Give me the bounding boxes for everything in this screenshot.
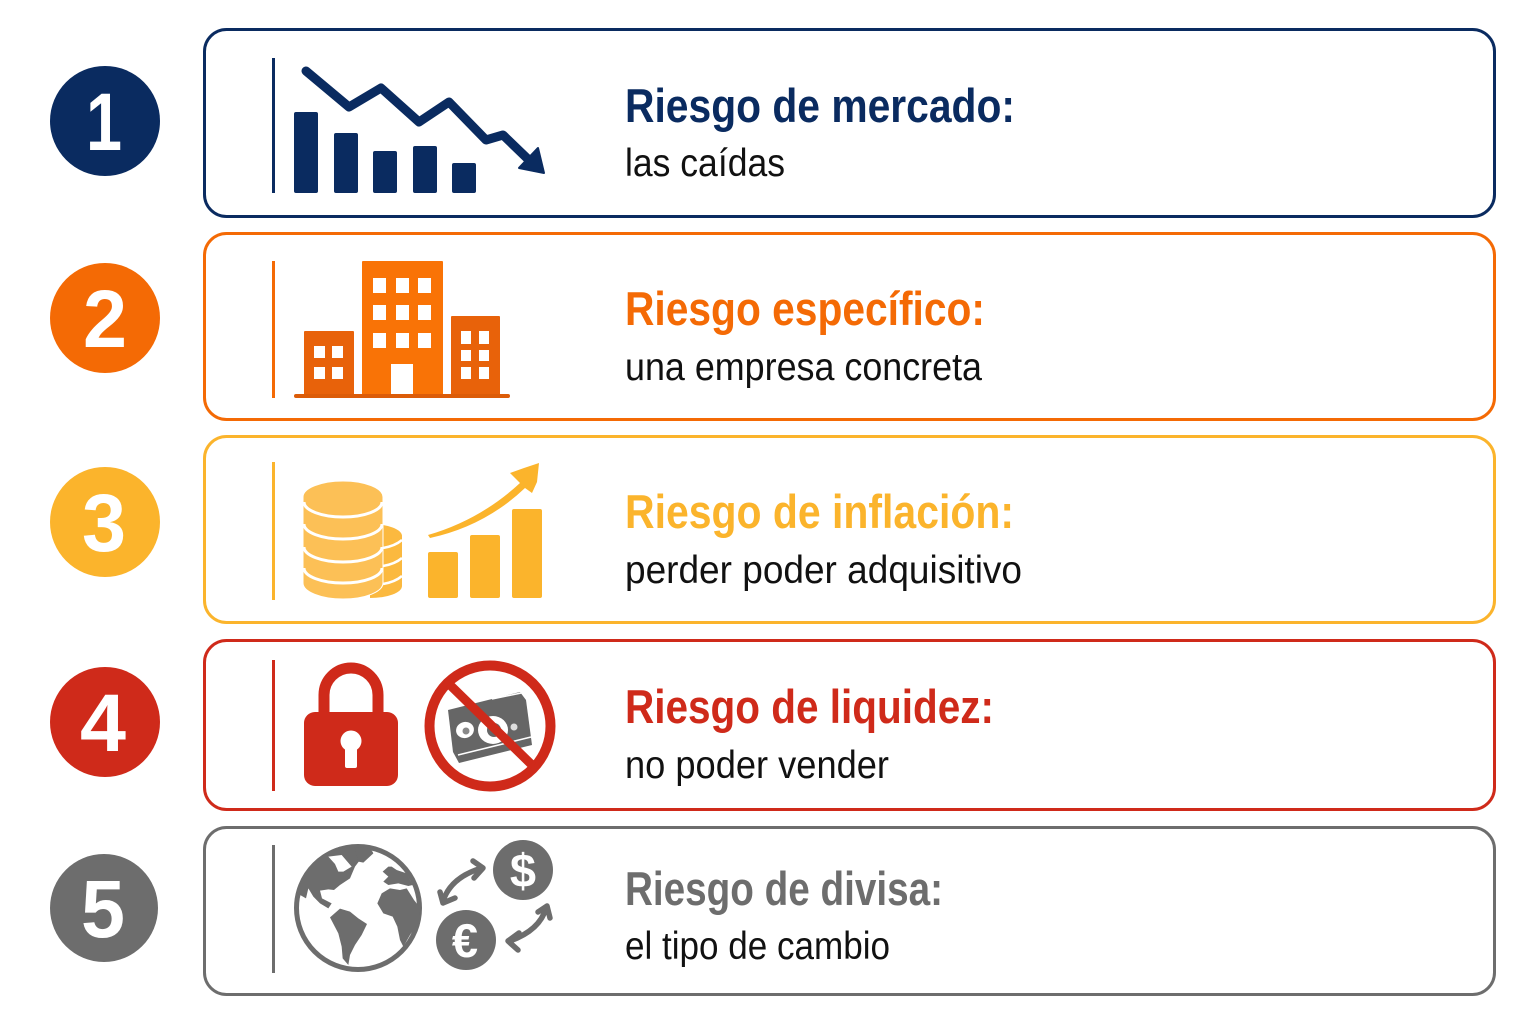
icon: currency exchange — [436, 840, 553, 970]
number badge 1 — [50, 66, 160, 176]
heading: riesgo de liquidez: Riesgo de liquidez: — [625, 680, 994, 733]
text: perder poder adquisitivo: perder poder adquisitivo — [625, 549, 1022, 592]
icon: no cash sign — [430, 666, 550, 786]
panel: riesgo especifico — [50, 234, 1494, 420]
heading: riesgo de mercado: Riesgo de mercado: — [625, 79, 1015, 132]
number badge 5 — [50, 854, 158, 962]
number badge 3: 3 — [82, 478, 126, 569]
text: las caidas: las caídas — [625, 142, 785, 185]
number badge 2: 2 — [83, 274, 127, 365]
panel: riesgo de inflacion — [50, 436, 1494, 622]
number badge 1: 1 — [86, 77, 122, 168]
panel: riesgo de liquidez — [50, 640, 1494, 810]
icon: currency exchange: $ — [510, 844, 536, 897]
heading: riesgo de divisa: Riesgo de divisa: — [625, 862, 943, 915]
text: no poder vender: no poder vender — [625, 744, 889, 787]
heading: riesgo especifico: Riesgo específico: — [625, 282, 985, 335]
icon: coins and rising chart — [272, 462, 542, 600]
icon: globe — [272, 845, 421, 973]
heading: riesgo de inflacion: Riesgo de inflación: — [625, 485, 1014, 538]
icon: falling bar chart — [272, 58, 544, 193]
icon: office buildings — [272, 261, 510, 398]
number badge 3 — [50, 467, 160, 577]
icon: padlock — [272, 660, 398, 791]
number badge 2 — [50, 263, 160, 373]
number badge 4 — [50, 667, 160, 777]
panel: riesgo de divisa — [50, 828, 1494, 994]
number badge 5: 5 — [81, 864, 125, 955]
number badge 4: 4 — [80, 678, 126, 769]
panel: riesgo de mercado — [50, 30, 1494, 216]
icon: currency exchange: € — [452, 914, 478, 967]
text: el tipo de cambio: el tipo de cambio — [625, 925, 890, 968]
text: una empresa concreta: una empresa concreta — [625, 346, 982, 389]
